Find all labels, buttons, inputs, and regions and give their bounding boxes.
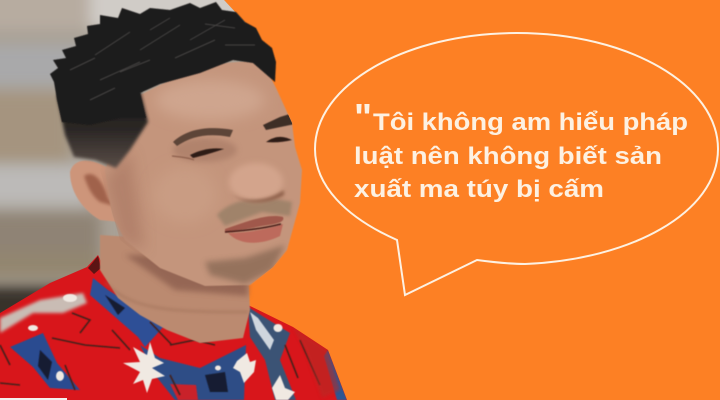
stubble above lip	[217, 198, 292, 226]
forehead light	[155, 80, 265, 120]
shirt collar band right	[248, 307, 296, 400]
speech bubble	[315, 33, 718, 295]
nose shadow	[230, 190, 284, 203]
right eye	[266, 137, 292, 142]
left eye crease	[172, 156, 194, 160]
right eyebrow	[263, 113, 295, 130]
left eye	[190, 148, 224, 158]
shirt dark blue accents	[38, 295, 228, 392]
neck	[100, 235, 250, 343]
shirt collar tag	[88, 256, 101, 274]
shirt pale band inside right collar	[250, 312, 274, 350]
face	[105, 60, 302, 286]
shirt right shade	[293, 327, 340, 398]
shirt white flowers	[28, 294, 295, 400]
opening quotation mark: "	[354, 97, 372, 139]
person	[0, 2, 347, 400]
lower lip	[228, 224, 283, 243]
quote line 3: xuất ma túy bị cấm	[354, 176, 604, 203]
upper lip	[225, 216, 283, 232]
cheek light	[153, 167, 217, 223]
ear	[70, 161, 120, 222]
mouth line	[225, 224, 281, 232]
hair highlights	[70, 18, 255, 100]
quote line 1: Tôi không am hiểu pháp	[373, 109, 688, 136]
shirt red center patches	[170, 384, 198, 400]
hair	[50, 2, 276, 168]
shirt shoulder pale pattern	[0, 293, 87, 333]
ear inner shadow	[84, 174, 114, 206]
temple short hair	[57, 90, 148, 168]
shirt right edge band	[324, 350, 347, 400]
shirt	[0, 255, 347, 400]
nose	[229, 163, 283, 201]
blurred photo background	[0, 0, 246, 313]
left eyebrow	[173, 128, 233, 146]
neck shadow under jaw	[125, 255, 248, 296]
quote line 2: luật nên không biết sản	[354, 143, 662, 170]
eye socket shadow	[173, 138, 237, 162]
main hair	[50, 2, 276, 125]
shirt blue lower band	[140, 345, 246, 400]
chin stubble	[205, 245, 285, 284]
neck crease	[105, 282, 248, 312]
white strip at image bottom	[0, 398, 67, 400]
shirt blue dragon left	[10, 333, 80, 390]
shirt dark branches	[0, 313, 320, 395]
bubble outline with tail	[315, 33, 718, 295]
red shirt base	[0, 255, 347, 400]
shirt collar band left	[90, 278, 165, 347]
cheek shading near ear	[105, 150, 145, 250]
